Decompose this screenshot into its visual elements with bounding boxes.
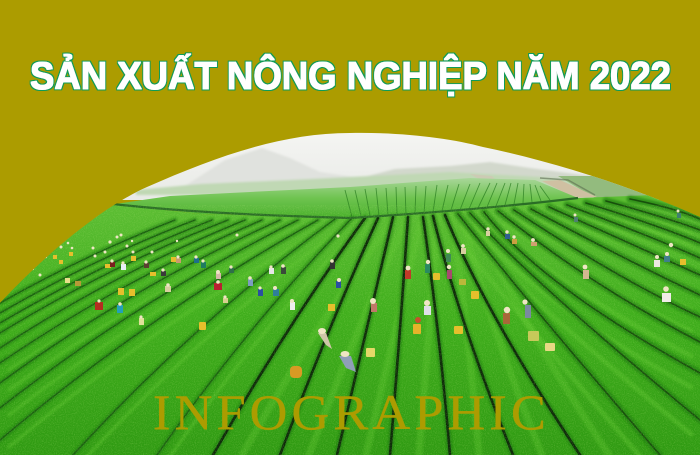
watermark label: INFOGRAPHIC: INFOGRAPHIC: [153, 384, 550, 440]
far field and road: [470, 174, 655, 198]
workers bodies: [95, 213, 681, 372]
upper terrace: [115, 178, 578, 218]
tea rows: [0, 199, 700, 455]
baskets: [53, 252, 686, 378]
workers conical hats: [32, 210, 680, 357]
sky: [122, 132, 660, 200]
dark hedge line: [113, 198, 578, 218]
title: SẢN XUẤT NÔNG NGHIỆP NĂM 2022: [30, 53, 671, 98]
leaf texture: [0, 205, 700, 455]
photo: tea plantation in arched frame: [0, 125, 700, 455]
misty hills: [136, 148, 600, 195]
main tea field: [0, 195, 700, 455]
